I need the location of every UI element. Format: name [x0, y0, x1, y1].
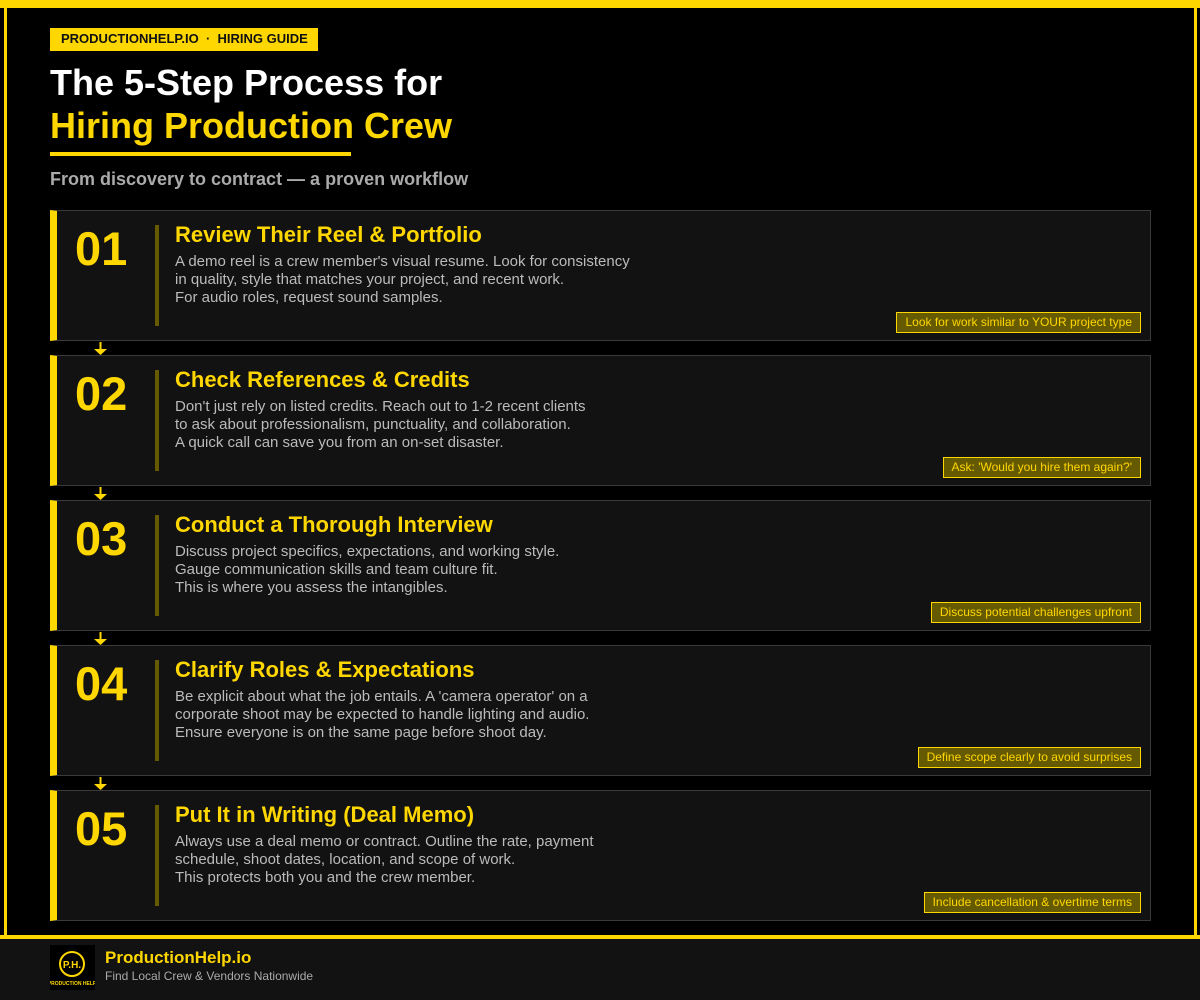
- step 05: 05: [75, 802, 127, 855]
- step 05: schedule, shoot dates, location, and scope of work.: [175, 851, 515, 868]
- logo: P.H.: [63, 960, 81, 971]
- step 04: corporate shoot may be expected to handle lighting and audio.: [175, 706, 589, 723]
- subtitle: From discovery to contract — a proven workflow: [50, 169, 468, 189]
- step 01: For audio roles, request sound samples.: [175, 289, 443, 306]
- logo: [50, 945, 95, 990]
- step 05: This protects both you and the crew member.: [175, 869, 475, 886]
- brand name: ProductionHelp.io: [105, 948, 251, 967]
- step 02: [50, 355, 1151, 486]
- badge: PRODUCTIONHELP.IO · HIRING GUIDE: [61, 31, 308, 46]
- step 05: Always use a deal memo or contract. Outline the rate, payment: [175, 833, 594, 850]
- step 02: Ask: 'Would you hire them again?': [952, 460, 1132, 474]
- step 03: This is where you assess the intangibles.: [175, 579, 448, 596]
- step 04: Ensure everyone is on the same page before shoot day.: [175, 724, 547, 741]
- step 03: Conduct a Thorough Interview: [175, 512, 493, 537]
- step 01: Look for work similar to YOUR project type: [905, 315, 1132, 329]
- step 03: 03: [75, 512, 127, 565]
- tagline: Find Local Crew & Vendors Nationwide: [105, 969, 313, 983]
- step 05: Include cancellation & overtime terms: [933, 895, 1132, 909]
- arrow: [94, 342, 107, 355]
- step 02: 02: [75, 367, 127, 420]
- step 04: Be explicit about what the job entails. A 'camera operator' on a: [175, 688, 588, 705]
- title highlight: Hiring Production Crew: [50, 105, 452, 146]
- step 02: A quick call can save you from an on-set disaster.: [175, 434, 504, 451]
- step 05: [50, 790, 1151, 921]
- step 05: Put It in Writing (Deal Memo): [175, 802, 474, 827]
- arrow: [94, 487, 107, 500]
- step 04: Clarify Roles & Expectations: [175, 657, 475, 682]
- step 03: [50, 500, 1151, 631]
- arrow: [94, 777, 107, 790]
- step 03: Gauge communication skills and team culture fit.: [175, 561, 498, 578]
- step 02: Check References & Credits: [175, 367, 470, 392]
- arrow: [94, 632, 107, 645]
- step 01: 01: [75, 222, 127, 275]
- step 01: [50, 210, 1151, 341]
- step 01: in quality, style that matches your project, and recent work.: [175, 271, 564, 288]
- step 02: Don't just rely on listed credits. Reach out to 1-2 recent clients: [175, 398, 586, 415]
- step 04: Define scope clearly to avoid surprises: [927, 750, 1132, 764]
- step 01: A demo reel is a crew member's visual resume. Look for consistency: [175, 253, 630, 270]
- footer: [0, 939, 1200, 1000]
- step 02: to ask about professionalism, punctuality, and collaboration.: [175, 416, 571, 433]
- step 04: 04: [75, 657, 127, 710]
- badge: [50, 28, 318, 51]
- step 03: Discuss potential challenges upfront: [940, 605, 1132, 619]
- step 03: Discuss project specifics, expectations, and working style.: [175, 543, 559, 560]
- step 01: Review Their Reel & Portfolio: [175, 222, 482, 247]
- step 04: [50, 645, 1151, 776]
- title: The 5-Step Process for: [50, 62, 442, 103]
